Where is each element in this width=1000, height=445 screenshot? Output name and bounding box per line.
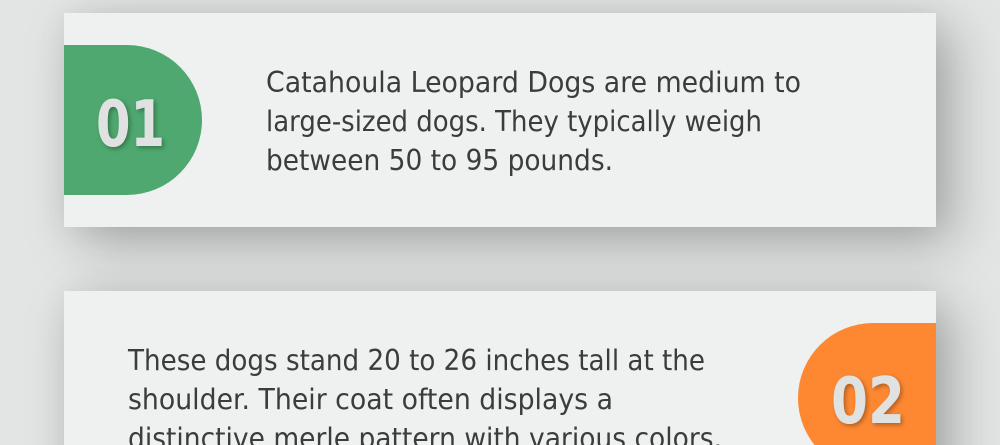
badge: 01 [64,45,202,195]
text: card 01 body: Catahoula Leopard Dogs are medium to [266,66,801,99]
badge: 01: 01 [96,88,165,162]
badge: 02 [798,323,936,445]
text: card 01 body [266,66,801,177]
text: card 01 body: large-sized dogs. They typically weigh [266,105,762,138]
text: card 02 body: These dogs stand 20 to 26 inches tall at the [127,344,705,377]
text: card 02 body [127,344,722,445]
badge: 02: 02 [831,365,905,439]
panel: card 01 [64,13,936,227]
text: card 02 body: shoulder. Their coat often displays a [128,383,613,416]
panel: card 02 [64,291,936,445]
text: card 01 body: between 50 to 95 pounds. [266,144,613,177]
